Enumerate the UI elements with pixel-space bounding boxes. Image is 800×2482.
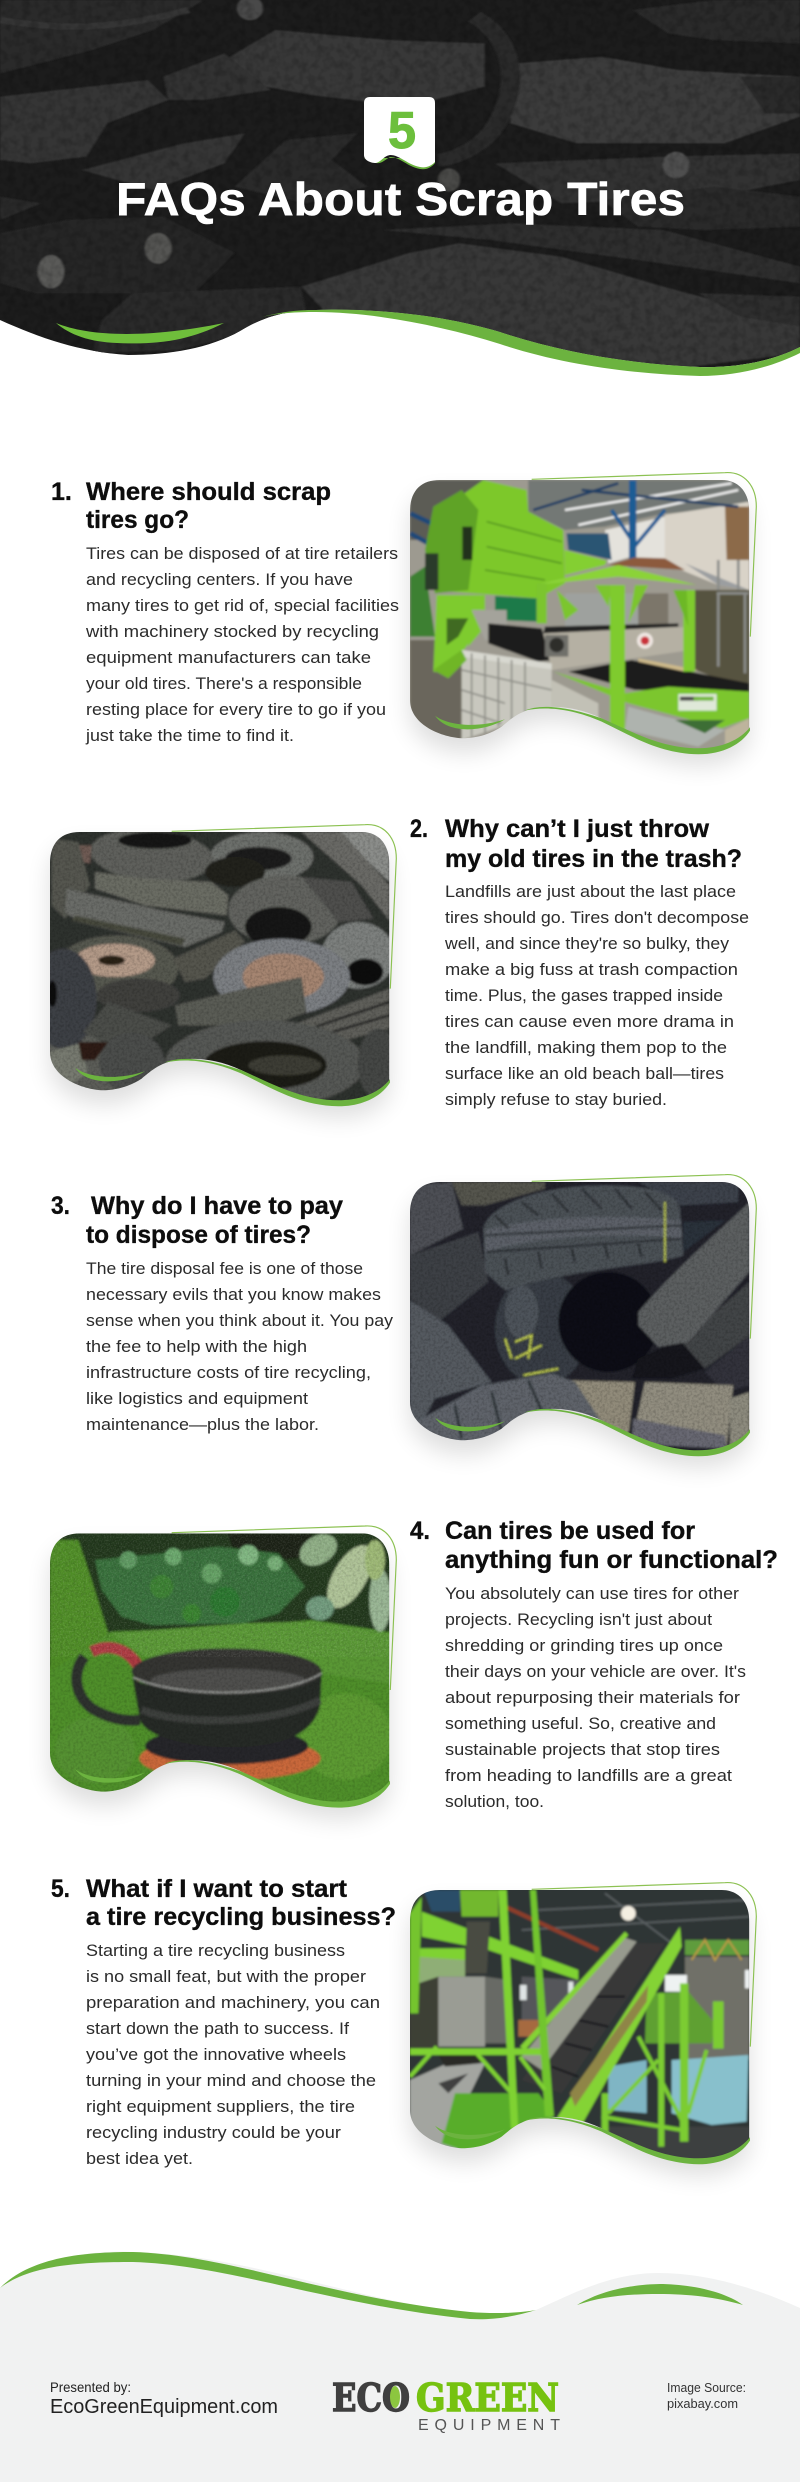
body text 5 <box>86 1942 380 2168</box>
panel: FAQ 4 <box>45 1517 778 1819</box>
body text 3: like logistics and equipment <box>86 1390 308 1408</box>
body text 5: best idea yet. <box>86 2150 193 2168</box>
body text 2: make a big fuss at trash compaction <box>445 961 738 979</box>
small green swoosh in header <box>56 323 224 343</box>
body text 3: sense when you think about it. You pay <box>86 1312 394 1330</box>
number and heading 5: a tire recycling business? <box>86 1903 396 1931</box>
body text 3: the fee to help with the high <box>86 1338 307 1356</box>
panel: FAQ 5 <box>51 1875 758 2176</box>
number and heading 1 <box>51 478 331 534</box>
footer green wave <box>0 2252 536 2319</box>
panel: FAQ 1 <box>51 470 758 766</box>
green frame outline 5 <box>435 1883 756 2164</box>
presented by: Presented by: <box>50 2379 131 2395</box>
body text 3: necessary evils that you know makes <box>86 1286 381 1304</box>
green frame outline 3 <box>435 1175 756 1456</box>
number and heading 2: my old tires in the trash? <box>445 845 742 873</box>
green frame outline 2 <box>75 825 396 1106</box>
body text 1: just take the time to find it. <box>85 727 294 745</box>
image source <box>667 2380 746 2411</box>
number and heading 4 <box>410 1517 778 1574</box>
logo: Eco Green Equipment <box>332 2375 560 2434</box>
body text 5: turning in your mind and choose the <box>86 2072 376 2090</box>
photo 4: tire teacup planter on lawn <box>45 1523 398 1819</box>
green frame outline 1 <box>435 473 756 754</box>
body text 1: and recycling centers. If you have <box>86 571 353 589</box>
number and heading 1: Where should scrap <box>86 478 331 506</box>
presented by <box>50 2379 278 2418</box>
number and heading 4: 4. <box>410 1517 430 1545</box>
number and heading 5: 5. <box>51 1875 70 1903</box>
body text 4: something useful. So, creative and <box>445 1715 716 1733</box>
body text 3: The tire disposal fee is one of those <box>86 1260 363 1278</box>
body text 2: simply refuse to stay buried. <box>445 1091 667 1109</box>
body text 3: maintenance—plus the labor. <box>86 1416 319 1434</box>
body text 1 <box>85 545 399 745</box>
presented by: EcoGreenEquipment.com <box>50 2396 278 2418</box>
photo 5: green conveyor plant <box>405 1880 758 2176</box>
body text 5: you’ve got the innovative wheels <box>86 2046 346 2064</box>
footer <box>0 2252 800 2482</box>
body text 5: start down the path to success. If <box>86 2020 349 2038</box>
footer small green swoosh <box>577 2284 743 2305</box>
number and heading 5: What if I want to start <box>86 1875 348 1903</box>
logo: Eco Green Equipment: EQUIPMENT <box>418 2417 560 2434</box>
number and heading 3: to dispose of tires? <box>86 1221 311 1249</box>
body text 2: surface like an old beach ball—tires <box>445 1065 724 1083</box>
badge with number 5 <box>364 97 435 169</box>
body text 2: tires can cause even more drama in <box>445 1013 734 1031</box>
image source: pixabay.com <box>667 2396 738 2411</box>
number and heading 3: Why do I have to pay <box>91 1192 343 1220</box>
number and heading 5 <box>51 1875 396 1931</box>
body text 1: many tires to get rid of, special facilities <box>86 597 399 615</box>
header banner with tire photo <box>0 0 800 380</box>
body text 1: Tires can be disposed of at tire retailers <box>86 545 398 563</box>
body text 1: your old tires. There's a responsible <box>86 675 362 693</box>
number and heading 4: Can tires be used for <box>445 1517 695 1545</box>
number and heading 2: Why can’t I just throw <box>445 815 710 843</box>
body text 2: tires should go. Tires don't decompose <box>445 909 749 927</box>
green frame outline 4 <box>75 1526 396 1808</box>
body text 4 <box>445 1585 746 1811</box>
number and heading 2 <box>410 815 742 873</box>
body text 5: right equipment suppliers, the tire <box>86 2098 355 2116</box>
number and heading 3: 3. <box>51 1192 70 1220</box>
number and heading 4: anything fun or functional? <box>445 1546 778 1574</box>
panel: FAQ 3 <box>51 1172 758 1468</box>
body text 4: solution, too. <box>445 1793 544 1811</box>
body text 2 <box>444 883 749 1109</box>
body text 5: recycling industry could be your <box>86 2124 342 2142</box>
photo 1: green shredding machine <box>405 470 758 766</box>
body text 2: Landfills are just about the last place <box>445 883 736 901</box>
body text 5: preparation and machinery, you can <box>86 1994 380 2012</box>
body text 1: resting place for every tire to go if you <box>86 701 386 719</box>
header photo: pile of dark tires <box>0 0 800 380</box>
green wave under header <box>262 310 800 376</box>
body text 4: sustainable projects that stop tires <box>445 1741 720 1759</box>
body text 3 <box>86 1260 394 1434</box>
image source: Image Source: <box>667 2380 746 2395</box>
body text 3: infrastructure costs of tire recycling, <box>86 1364 371 1382</box>
number and heading 1: 1. <box>51 478 72 506</box>
body text 4: shredding or grinding tires up once <box>445 1637 723 1655</box>
badge with number 5: 5 <box>388 102 416 160</box>
body text 4: projects. Recycling isn't just about <box>445 1611 712 1629</box>
panel: FAQ 2 <box>30 815 749 1118</box>
body text 2: well, and since they're so bulky, they <box>444 935 730 953</box>
title: FAQs About Scrap Tires <box>116 173 685 225</box>
body text 4: about repurposing their materials for <box>445 1689 741 1707</box>
number and heading 1: tires go? <box>86 506 189 534</box>
photo 3: stacked car tires <box>405 1172 758 1468</box>
number and heading 2: 2. <box>410 815 428 843</box>
logo: Eco Green Equipment: ECO <box>332 2375 410 2420</box>
body text 1: equipment manufacturers can take <box>86 649 371 667</box>
logo: Eco Green Equipment: GREEN <box>416 2375 559 2420</box>
body text 4: You absolutely can use tires for other <box>445 1585 740 1603</box>
body text 5: Starting a tire recycling business <box>86 1942 345 1960</box>
body text 2: time. Plus, the gases trapped inside <box>445 987 723 1005</box>
body text 5: is no small feat, but with the proper <box>86 1968 367 1986</box>
body text 2: the landfill, making them pop to the <box>445 1039 727 1057</box>
body text 1: with machinery stocked by recycling <box>85 623 379 641</box>
body text 4: from heading to landfills are a great <box>445 1767 732 1785</box>
photo 2: heap of used tires <box>30 822 399 1118</box>
number and heading 3 <box>51 1192 343 1249</box>
body text 4: their days on your vehicle are over. It's <box>445 1663 746 1681</box>
footer grey wave background <box>0 2252 800 2482</box>
